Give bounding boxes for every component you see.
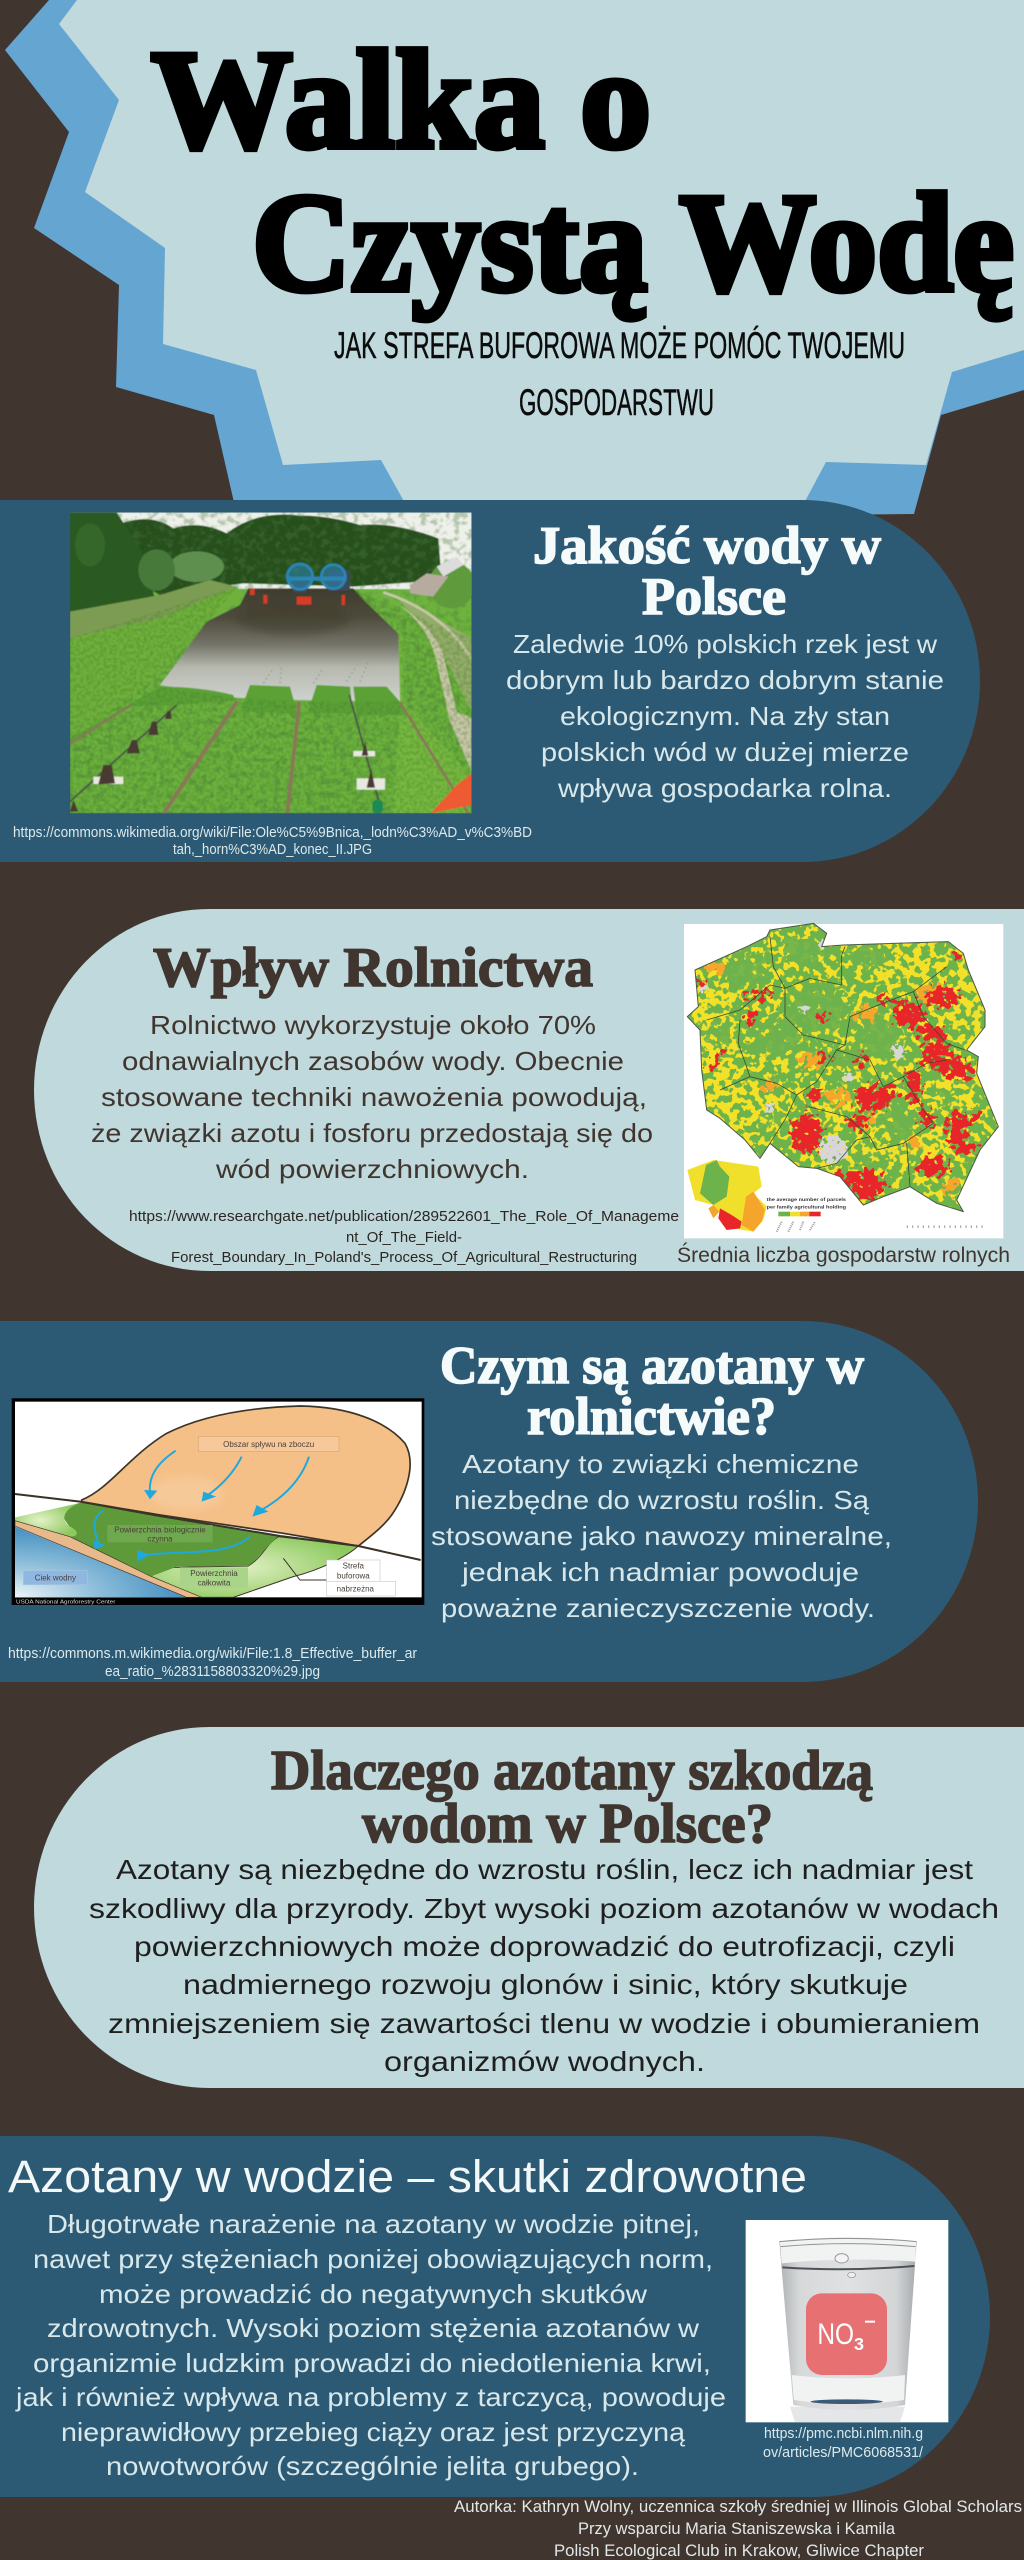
title: Walka o [151, 22, 651, 178]
orange patches [705, 959, 960, 1197]
photo source caption [13, 824, 532, 858]
inset map [687, 1160, 767, 1232]
diagram labels [23, 1437, 395, 1596]
heading [271, 1740, 873, 1855]
body text: poważne zanieczyszczenie wody. [441, 1593, 875, 1623]
title: Czystą Wodę [252, 165, 1014, 321]
body text: nowotworów (szczególnie jelita grubego). [106, 2451, 639, 2481]
diagram labels: Strefa [343, 1561, 365, 1570]
icon: glass of water with NO3 label: NO [817, 2318, 854, 2351]
panel: impact of agriculture [34, 909, 1024, 1271]
map source caption: Forest_Boundary_In_Poland's_Process_Of_Agricultural_Restructuring [171, 1249, 637, 1266]
body text: Azotany są niezbędne do wzrostu roślin, lecz ich nadmiar jest [116, 1854, 973, 1885]
map: farms in Poland [684, 922, 1004, 1238]
diagram labels: nabrzeżna [337, 1584, 375, 1593]
diagram labels: Ciek wodny [35, 1574, 76, 1583]
subtitle: GOSPODARSTWU [519, 382, 714, 423]
diagram labels: Powierzchnia [190, 1569, 238, 1578]
heading [440, 1337, 864, 1446]
footer credits: Autorka: Kathryn Wolny, uczennica szkoły średniej w Illinois Global Scholars [454, 2497, 1022, 2516]
body text: jednak ich nadmiar powoduje [461, 1557, 859, 1587]
heading: Polsce [642, 568, 786, 626]
diagram labels: Obszar spływu na zboczu [223, 1440, 314, 1449]
body text: ekologicznym. Na zły stan [560, 701, 890, 731]
body text: odnawialnych zasobów wody. Obecnie [122, 1046, 624, 1076]
image source caption [763, 2425, 924, 2461]
body text: nieprawidłowy przebieg ciąży oraz jest przyczyną [61, 2417, 686, 2447]
heading: Jakość wody w [533, 517, 881, 575]
body text: organizmie ludzkim prowadzi do niedotlenienia krwi, [33, 2348, 711, 2378]
icon: glass of water with NO3 label: 3 [854, 2334, 864, 2354]
yellow mottled layer [689, 924, 998, 1208]
diagram labels: całkowita [198, 1578, 231, 1587]
map legend [767, 1197, 987, 1232]
header: blue jagged shape [5, 0, 1024, 520]
diagram source caption: https://commons.m.wikimedia.org/wiki/File:1.8_Effective_buffer_ar [8, 1645, 417, 1662]
map legend: per family agricultural holding [767, 1204, 846, 1209]
body text: szkodliwy dla przyrody. Zbyt wysoki poziom azotanów w wodach [89, 1893, 999, 1924]
photo source caption: tah,_horn%C3%AD_konec_II.JPG [173, 841, 372, 858]
body text: jak i również wpływa na problemy z tarczycą, powoduje [15, 2382, 726, 2412]
heading: Dlaczego azotany szkodzą [271, 1740, 873, 1802]
diagram: riparian buffer zone: USDA National Agroforestry Center [16, 1599, 115, 1605]
panel: why nitrates harm [34, 1727, 1024, 2088]
body text [15, 2209, 726, 2481]
body text: polskich wód w dużej mierze [541, 737, 909, 767]
map source caption [129, 1208, 679, 1266]
body text: Rolnictwo wykorzystuje około 70% [150, 1010, 596, 1040]
body text [91, 1010, 653, 1184]
header: light jagged shape [59, 0, 1024, 505]
red patches [693, 950, 985, 1202]
green regions [702, 930, 962, 1169]
body text [506, 629, 944, 803]
body text: organizmów wodnych. [384, 2046, 705, 2077]
body text: niezbędne do wzrostu roślin. Są [454, 1485, 870, 1515]
panel: health effects [0, 2136, 990, 2497]
image source caption: ov/articles/PMC6068531/ [763, 2444, 924, 2461]
heading: Czym są azotany w [440, 1337, 864, 1395]
body text [89, 1854, 999, 2077]
footer credits: Polish Ecological Club in Krakow, Gliwice Chapter [554, 2541, 924, 2560]
image source caption: https://pmc.ncbi.nlm.nih.g [764, 2425, 923, 2442]
diagram labels: Powierzchnia biologicznie [114, 1525, 206, 1534]
diagram: riparian buffer zone [12, 1398, 424, 1605]
map source caption: https://www.researchgate.net/publication/289522601_The_Role_Of_Manageme [129, 1208, 679, 1225]
panel: water quality in Poland [0, 500, 980, 862]
body text: nawet przy stężeniach poniżej obowiązujących norm, [33, 2244, 713, 2274]
subtitle [334, 325, 905, 423]
heading: rolnictwie? [527, 1388, 776, 1446]
panel: what are nitrates [0, 1321, 978, 1682]
body text: że związki azotu i fosforu przedostają się do [91, 1118, 653, 1148]
diagram labels: buforowa [337, 1572, 370, 1581]
body text: Długotrwałe narażenie na azotany w wodzie pitnej, [47, 2209, 700, 2239]
heading: Wpływ Rolnictwa [153, 937, 593, 999]
body text: zdrowotnych. Wysoki poziom stężenia azotanów w [47, 2313, 699, 2343]
body text: dobrym lub bardzo dobrym stanie [506, 665, 944, 695]
body text: zmniejszeniem się zawartości tlenu w wodzie i obumieraniem [108, 2008, 980, 2039]
map caption: Średnia liczba gospodarstw rolnych [677, 1243, 1010, 1267]
body text: wpływa gospodarka rolna. [557, 773, 892, 803]
body text: stosowane jako nawozy mineralne, [431, 1521, 892, 1551]
body text: może prowadzić do negatywnych skutków [99, 2279, 647, 2309]
footer credits: Przy wsparciu Maria Staniszewska i Kamila [578, 2519, 896, 2538]
photo source caption: https://commons.wikimedia.org/wiki/File:Ole%C5%9Bnica,_lodn%C3%AD_v%C3%BD [13, 824, 532, 841]
photo: canal and grass [60, 505, 480, 825]
heading [533, 517, 881, 626]
diagram labels: czynna [147, 1534, 173, 1543]
diagram source caption [8, 1645, 417, 1680]
body text: Zaledwie 10% polskich rzek jest w [513, 629, 937, 659]
footer credits [454, 2497, 1022, 2560]
body text: stosowane techniki nawożenia powodują, [101, 1082, 647, 1112]
heading: wodom w Polsce? [362, 1793, 773, 1855]
flow arrows [95, 1451, 309, 1555]
body text: powierzchniowych może doprowadzić do eutrofizacji, czyli [134, 1931, 955, 1962]
body text: Azotany to związki chemiczne [462, 1449, 859, 1479]
diagram source caption: ea_ratio_%2831158803320%29.jpg [105, 1663, 320, 1680]
body text: nadmiernego rozwoju glonów i sinic, który skutkuje [183, 1969, 908, 2000]
map source caption: nt_Of_The_Field- [346, 1229, 462, 1246]
heading: Azotany w wodzie – skutki zdrowotne [8, 2151, 807, 2202]
body text: wód powierzchniowych. [215, 1154, 529, 1184]
map legend: the average number of parcels [767, 1197, 847, 1202]
title [151, 22, 1014, 321]
grey urban patches [697, 940, 906, 1165]
body text [431, 1449, 892, 1623]
voivodeship borders [707, 937, 965, 1187]
icon: glass of water with NO3 label [746, 2220, 948, 2422]
